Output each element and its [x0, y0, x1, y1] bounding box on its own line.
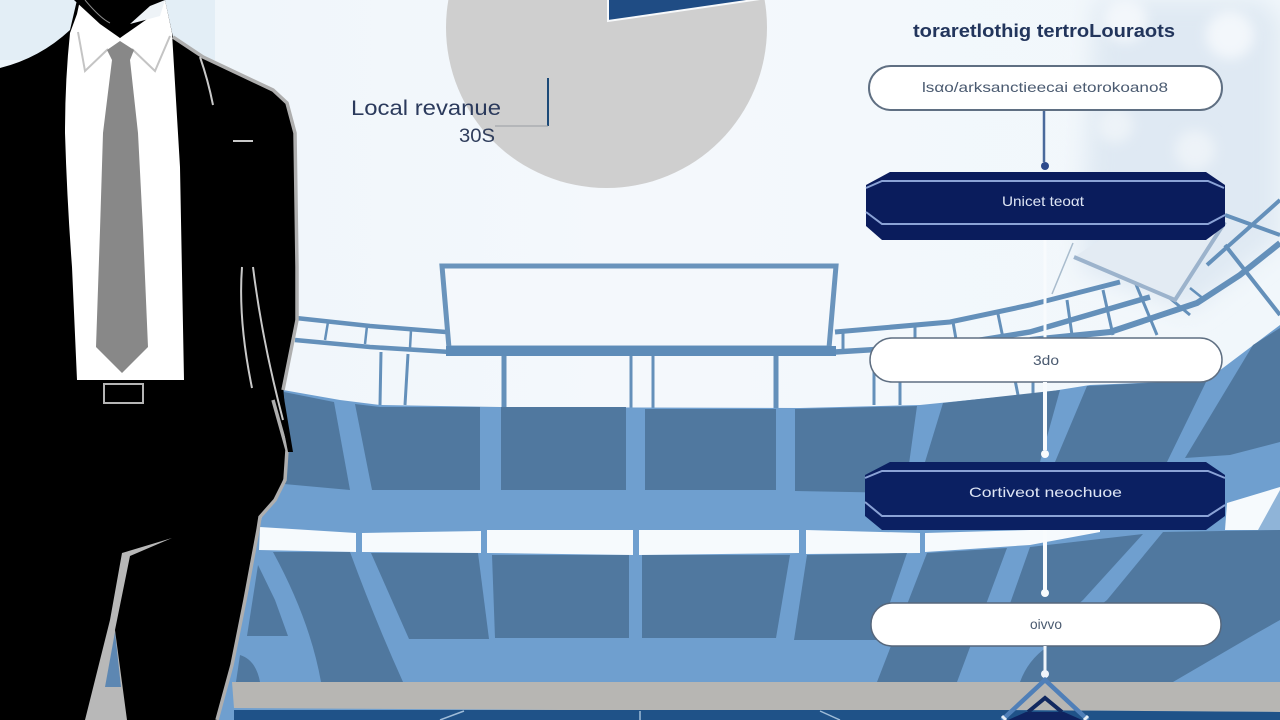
- connector 4: [1041, 530, 1049, 597]
- step 4 button: [865, 462, 1225, 530]
- lower tier seating panels: [236, 530, 1280, 682]
- body: [0, 0, 297, 720]
- step 5 pill: oivvo: [1030, 616, 1062, 632]
- step 1 pill: [869, 66, 1222, 110]
- stadium: [215, 200, 1280, 720]
- neck shadow: [74, 0, 165, 38]
- leg gap: [85, 538, 172, 720]
- connector 3: [1041, 382, 1049, 458]
- shirt: [65, 0, 184, 380]
- step 3 pill: 3do: [1033, 352, 1059, 368]
- step 5 pill: [871, 603, 1221, 646]
- local revenue label: 30S: [459, 126, 495, 147]
- icon: diamond marker: [1002, 680, 1088, 720]
- connector 2: [1044, 240, 1046, 340]
- tie: [96, 41, 148, 373]
- bokeh light panel: [1080, 0, 1280, 310]
- step 2 button: Unicet teoαt: [1002, 193, 1084, 209]
- lapel and sleeve lines: [200, 57, 283, 420]
- upper tier seating panels: [284, 328, 1280, 493]
- local revenue label: [351, 78, 548, 147]
- stand band: [215, 325, 1280, 720]
- flow diagram: [865, 21, 1225, 720]
- scoreboard: [442, 266, 836, 348]
- connector 1: [1041, 110, 1049, 170]
- connector 5: [1041, 646, 1049, 678]
- pie chart: [446, 0, 767, 188]
- walkway: [232, 682, 1280, 712]
- businessman silhouette: [0, 0, 297, 720]
- belt buckle: [104, 384, 143, 403]
- roof truss triangle: [1052, 222, 1225, 300]
- collar lines: [78, 32, 170, 71]
- upper stand and railings: [295, 200, 1280, 408]
- pie slice: highlighted share: [608, 0, 767, 21]
- step 2 button: [866, 172, 1225, 240]
- step 1 pill: lsαo/arksanctieecai etorokoano8: [922, 79, 1168, 95]
- step 4 button: Cortiveot neochuoe: [969, 484, 1122, 500]
- step 3 pill: [870, 338, 1222, 382]
- arm gap: [278, 392, 293, 452]
- flow title: toraretlothig tertroLouraots: [913, 21, 1175, 41]
- pitch: [234, 710, 1280, 720]
- white concourse strip: [259, 487, 1280, 555]
- local revenue label: Local revanue: [351, 97, 501, 120]
- jacket outline: [173, 37, 297, 720]
